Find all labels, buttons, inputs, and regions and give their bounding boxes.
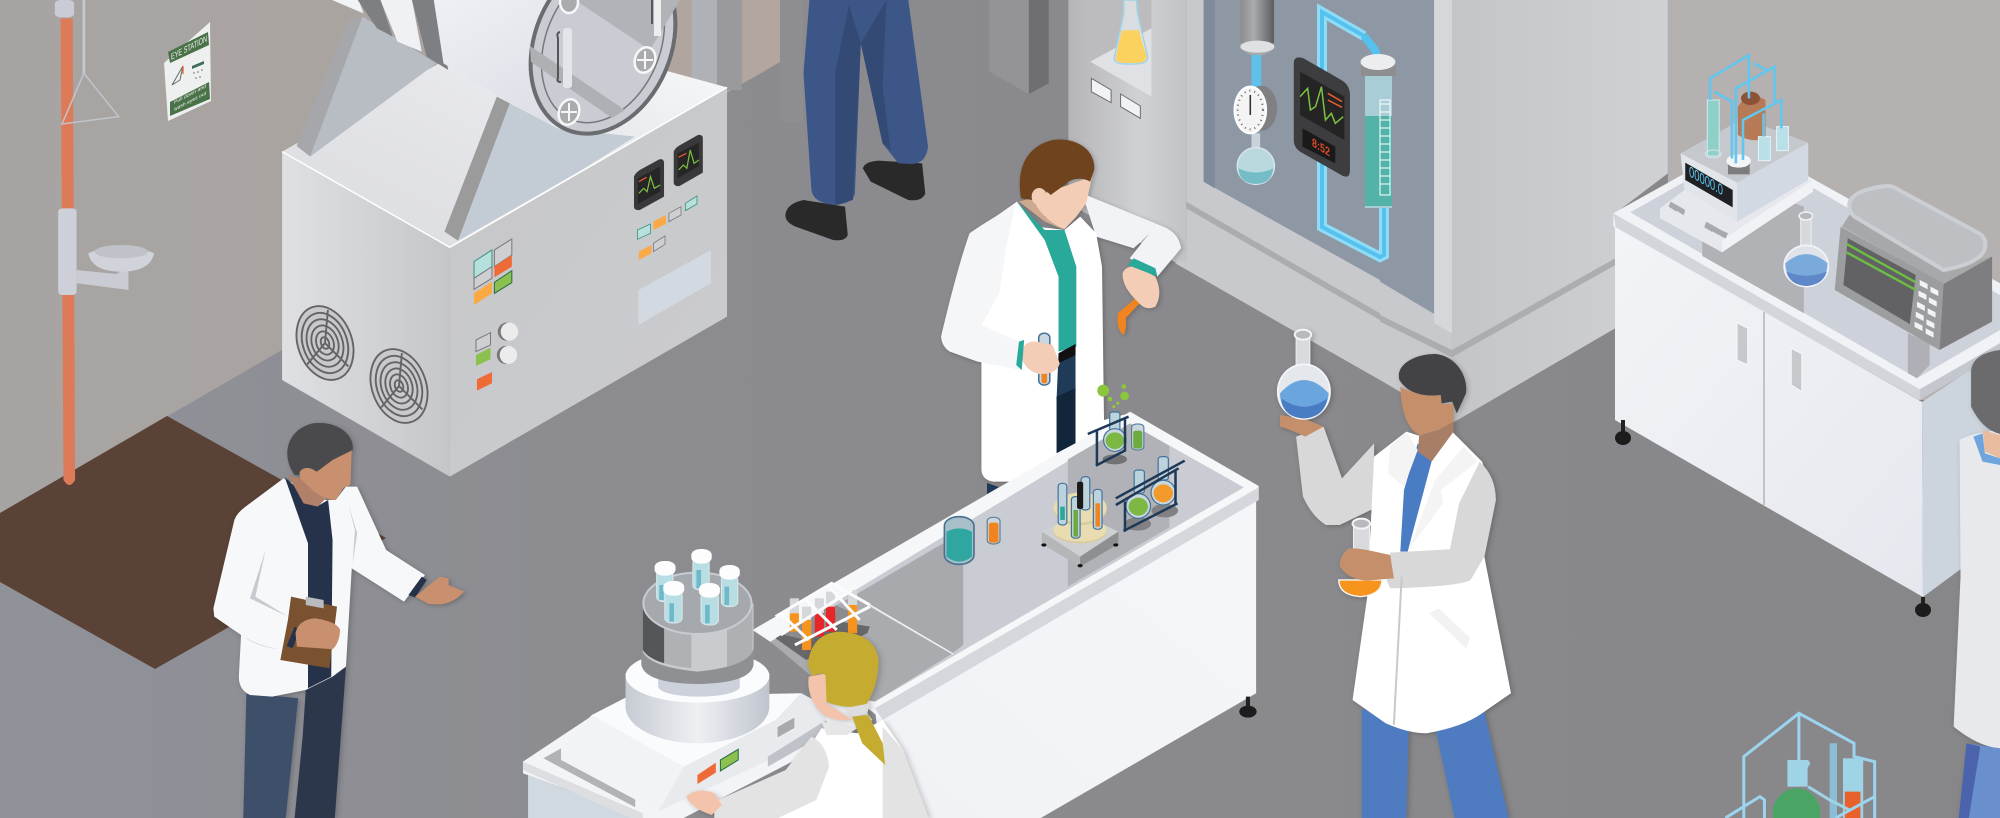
fan one — [287, 298, 363, 388]
rack of test tubes — [776, 583, 870, 660]
counter — [1613, 140, 2000, 400]
lower hand — [1340, 548, 1394, 581]
trousers — [1362, 708, 1409, 818]
scientist with clipboard — [213, 423, 464, 818]
door handles — [563, 28, 572, 88]
shirt — [285, 477, 333, 688]
scientist holding flasks — [1278, 330, 1511, 818]
test tube — [1039, 333, 1050, 385]
flasks on stands — [1088, 412, 1185, 532]
wall monitor: 8:52 — [1312, 136, 1330, 160]
balance with tubes — [1660, 55, 1813, 252]
pipette — [1117, 298, 1140, 335]
controls — [697, 763, 716, 784]
flask niche — [1090, 0, 1151, 97]
machine monitors — [634, 159, 664, 210]
eye station sign: Pull down and — [174, 83, 206, 105]
syringe column — [1360, 54, 1396, 208]
blonde scientist seen from behind — [686, 632, 929, 818]
door handles — [1737, 323, 1748, 365]
left arm — [941, 205, 1023, 370]
tray instrument — [1835, 186, 1992, 350]
scientist with teal shirt — [941, 139, 1181, 482]
instrument housing — [561, 693, 827, 812]
right hand — [1123, 266, 1159, 308]
teal shirt — [1017, 202, 1076, 352]
ear — [1032, 188, 1047, 205]
worktop — [1630, 148, 2000, 378]
clipboard — [280, 597, 337, 668]
glowing blue coolant loop — [1322, 12, 1384, 257]
machine body — [282, 152, 450, 477]
neck — [288, 475, 326, 507]
yellow conical flask — [1114, 0, 1148, 64]
coat — [1353, 432, 1511, 733]
central lab bench — [753, 412, 1259, 818]
small vials — [1758, 137, 1770, 161]
right arm — [1082, 193, 1181, 277]
large equipment cabinet with panel — [1068, 0, 1668, 423]
cabinet doors — [1615, 227, 1923, 597]
carousel of sample tubes on a scale — [1041, 477, 1118, 567]
eye station sign: wash eyes out — [174, 90, 207, 112]
cabinet casters — [1621, 420, 1625, 434]
vials — [657, 558, 738, 625]
chamber door — [504, 0, 702, 156]
hair — [1399, 354, 1466, 413]
coat folds — [250, 550, 288, 617]
machine small keys — [637, 224, 650, 239]
back wall left — [0, 0, 803, 513]
machine controls — [474, 135, 711, 391]
open hand — [408, 577, 427, 597]
man with blue trousers in background — [785, 0, 928, 240]
neck — [1418, 413, 1454, 462]
side cabinet — [1613, 140, 2000, 617]
right support — [444, 97, 510, 241]
bioreactor instrument with vials — [523, 549, 872, 818]
measuring cylinder — [1707, 100, 1719, 156]
raised hand — [1280, 415, 1324, 437]
beaker and orange tube — [944, 517, 1000, 564]
blue tubing — [1710, 55, 1781, 163]
wall monitor — [1294, 57, 1350, 177]
raised sleeve — [1296, 427, 1374, 525]
back grey column box — [989, 0, 1049, 94]
scientist at right edge — [1954, 350, 2000, 818]
face — [300, 450, 352, 500]
orange flask — [1353, 523, 1370, 553]
lapels — [1388, 432, 1418, 487]
hair — [287, 423, 353, 475]
coat — [981, 202, 1130, 482]
coat — [213, 478, 425, 697]
left hand — [1021, 341, 1060, 374]
green bubbles from flask — [1097, 384, 1129, 408]
face — [1400, 387, 1454, 436]
door bolts — [555, 0, 659, 128]
eye station sign — [164, 22, 211, 121]
reagent bottle — [1738, 92, 1766, 140]
worktop — [770, 423, 1244, 702]
coat seam and pocket — [1394, 577, 1402, 725]
steel cylinder, gauge and round flask — [1234, 0, 1277, 184]
vacuum chamber machine — [282, 0, 727, 477]
green flask — [1110, 412, 1120, 432]
blue flask — [1296, 333, 1310, 370]
lower sleeve — [1387, 462, 1496, 588]
drum — [643, 603, 754, 682]
eye station sign: EYE STATION — [171, 33, 207, 62]
neck — [1019, 197, 1064, 230]
back wall right — [1668, 0, 2000, 400]
stopper — [1728, 162, 1750, 174]
drum — [332, 0, 364, 13]
rubber floor mat — [0, 416, 386, 669]
fan two — [361, 341, 437, 431]
blue glass distillation apparatus — [1725, 713, 1875, 818]
blue round flask on the cabinet — [1784, 212, 1828, 287]
white front — [875, 500, 1256, 818]
bench rim — [753, 412, 1259, 720]
hair — [1020, 139, 1094, 200]
grey panel — [1204, 0, 1380, 280]
shirt — [1400, 443, 1432, 552]
balance readout: 00000.0 — [1689, 162, 1723, 199]
trousers — [243, 693, 298, 818]
emergency shower pipe and eye wash station — [55, 0, 154, 485]
tail of trousers behind central bench — [987, 483, 999, 494]
trousers — [1057, 345, 1076, 400]
second stand flasks — [1134, 470, 1144, 493]
face — [1035, 177, 1092, 229]
bench corner — [523, 700, 872, 818]
holding hand — [287, 627, 300, 648]
cabinet side — [1922, 350, 2000, 597]
left support — [297, 17, 364, 157]
caster — [1246, 697, 1250, 710]
base discs — [626, 673, 769, 743]
